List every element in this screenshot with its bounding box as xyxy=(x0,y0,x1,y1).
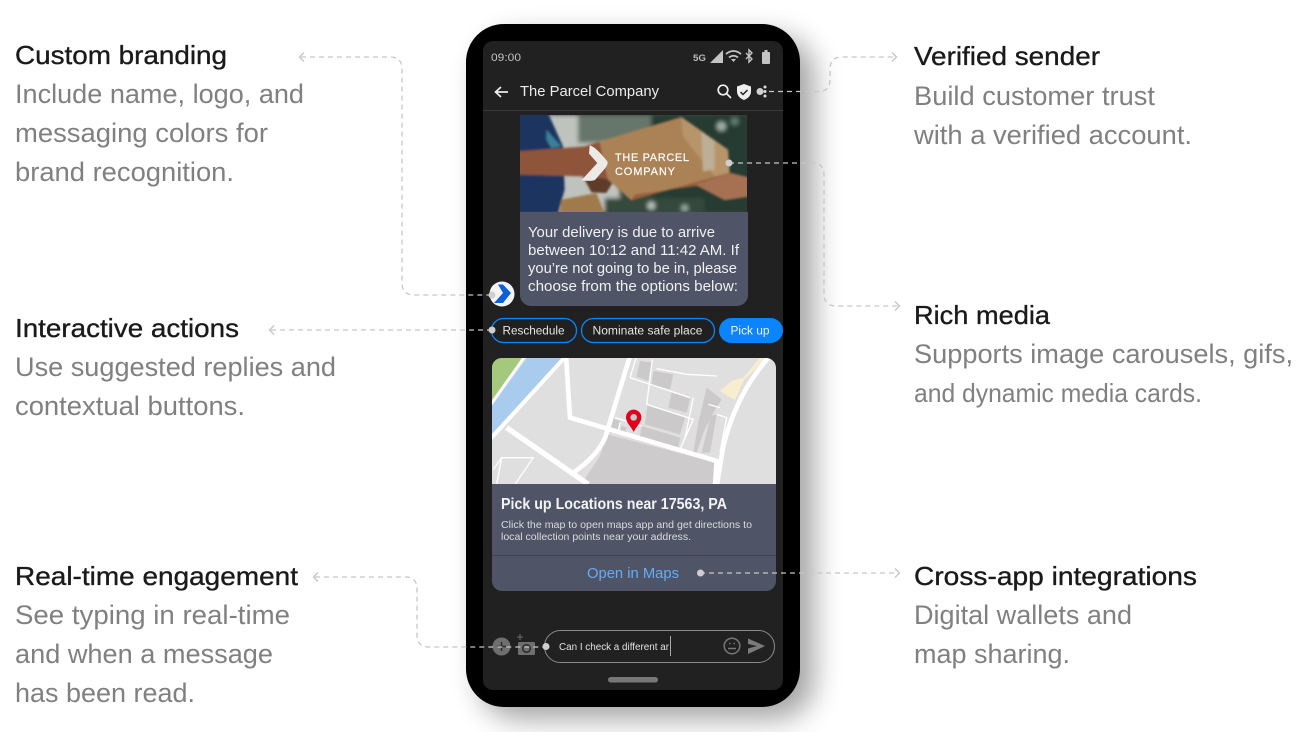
callout: real-time engagement xyxy=(15,561,299,708)
callout: verified sender: with a verified account. xyxy=(913,120,1192,150)
card description: local collection points near your address. xyxy=(501,531,691,543)
card title: Pick up Locations near 17563, PA xyxy=(501,496,727,513)
home indicator xyxy=(608,677,658,682)
callout: interactive actions: Interactive actions xyxy=(15,313,239,343)
callout: rich media: Supports image carousels, gifs, xyxy=(914,339,1293,369)
app header xyxy=(496,84,766,100)
callout: custom branding: Custom branding xyxy=(15,40,227,70)
callout: rich media xyxy=(914,300,1293,408)
chip: pick up: Pick up xyxy=(730,326,770,338)
header title: The Parcel Company xyxy=(520,84,660,100)
connector: verified sender xyxy=(756,52,896,95)
icon: camera xyxy=(517,634,535,655)
map xyxy=(490,356,776,486)
icon: search xyxy=(718,85,731,98)
status bar xyxy=(491,50,770,64)
message bubble: choose from the options below: xyxy=(528,279,738,295)
card action: Open in Maps xyxy=(587,566,679,582)
message bubble xyxy=(520,212,748,306)
callout: cross-app integrations: map sharing. xyxy=(914,639,1070,669)
logo mark xyxy=(581,145,608,181)
callout: real-time engagement: and when a message xyxy=(15,639,273,669)
status bar: 09:00 xyxy=(491,52,521,64)
callout: real-time engagement: See typing in real-time xyxy=(15,600,290,630)
icon: overflow menu xyxy=(764,86,766,98)
callout: verified sender xyxy=(913,41,1192,150)
media image: parcel hand-over xyxy=(518,113,751,213)
connector: custom branding xyxy=(300,52,496,298)
chip: reschedule: Reschedule xyxy=(502,326,564,338)
chip: nominate safe place xyxy=(582,318,714,342)
phone screen xyxy=(483,41,783,690)
back arrow xyxy=(496,87,508,97)
message bubble: Your delivery is due to arrive xyxy=(528,225,715,241)
connector: cross-app integrations xyxy=(697,568,900,578)
message composer xyxy=(492,630,774,682)
callout: custom branding: Include name, logo, and xyxy=(15,79,304,109)
callout: verified sender: Verified sender xyxy=(914,41,1100,71)
icon: emoji xyxy=(724,638,740,654)
callout: custom branding: messaging colors for xyxy=(15,118,268,148)
logo wordmark: THE PARCEL xyxy=(615,152,689,164)
message bubble: between 10:12 and 11:42 AM. If xyxy=(528,243,740,259)
input field xyxy=(544,630,774,662)
card description xyxy=(501,519,752,543)
icon: verified shield xyxy=(737,84,751,100)
chip: reschedule xyxy=(492,318,576,342)
chip: pick up xyxy=(719,318,783,343)
callout: custom branding: brand recognition. xyxy=(15,157,234,187)
connector: interactive actions xyxy=(270,326,496,334)
map pin xyxy=(626,410,641,432)
phone xyxy=(466,24,814,719)
callout: verified sender: Build customer trust xyxy=(914,81,1155,111)
callout: rich media: Rich media xyxy=(914,300,1051,330)
status bar: 5G xyxy=(693,53,706,63)
message bubble: you’re not going to be in, please xyxy=(528,261,737,277)
typed text: Can I check a different ar xyxy=(559,642,670,653)
callout: cross-app integrations xyxy=(914,561,1197,669)
connector: real-time engagement xyxy=(314,572,550,650)
callout: cross-app integrations: Digital wallets and xyxy=(914,600,1132,630)
map card xyxy=(490,356,776,591)
avatar logo xyxy=(490,282,514,306)
icon: send xyxy=(748,638,765,654)
callout: interactive actions: contextual buttons. xyxy=(15,391,245,421)
callout: custom branding xyxy=(15,40,304,187)
connector: rich media xyxy=(726,160,900,310)
chip: nominate safe place: Nominate safe place xyxy=(592,326,702,338)
suggested reply chips xyxy=(492,318,783,343)
callout: cross-app integrations: Cross-app integrations xyxy=(914,561,1197,591)
media image: parcel hand-over: COMPANY xyxy=(615,166,676,178)
callout: interactive actions: Use suggested replies and xyxy=(15,352,336,382)
callout: real-time engagement: Real-time engagement xyxy=(15,561,299,591)
icon: add attachment xyxy=(492,638,510,656)
callout: interactive actions xyxy=(15,313,336,421)
card description: Click the map to open maps app and get directions to xyxy=(501,519,752,531)
callout: real-time engagement: has been read. xyxy=(15,678,195,708)
callout: rich media: and dynamic media cards. xyxy=(914,378,1202,408)
